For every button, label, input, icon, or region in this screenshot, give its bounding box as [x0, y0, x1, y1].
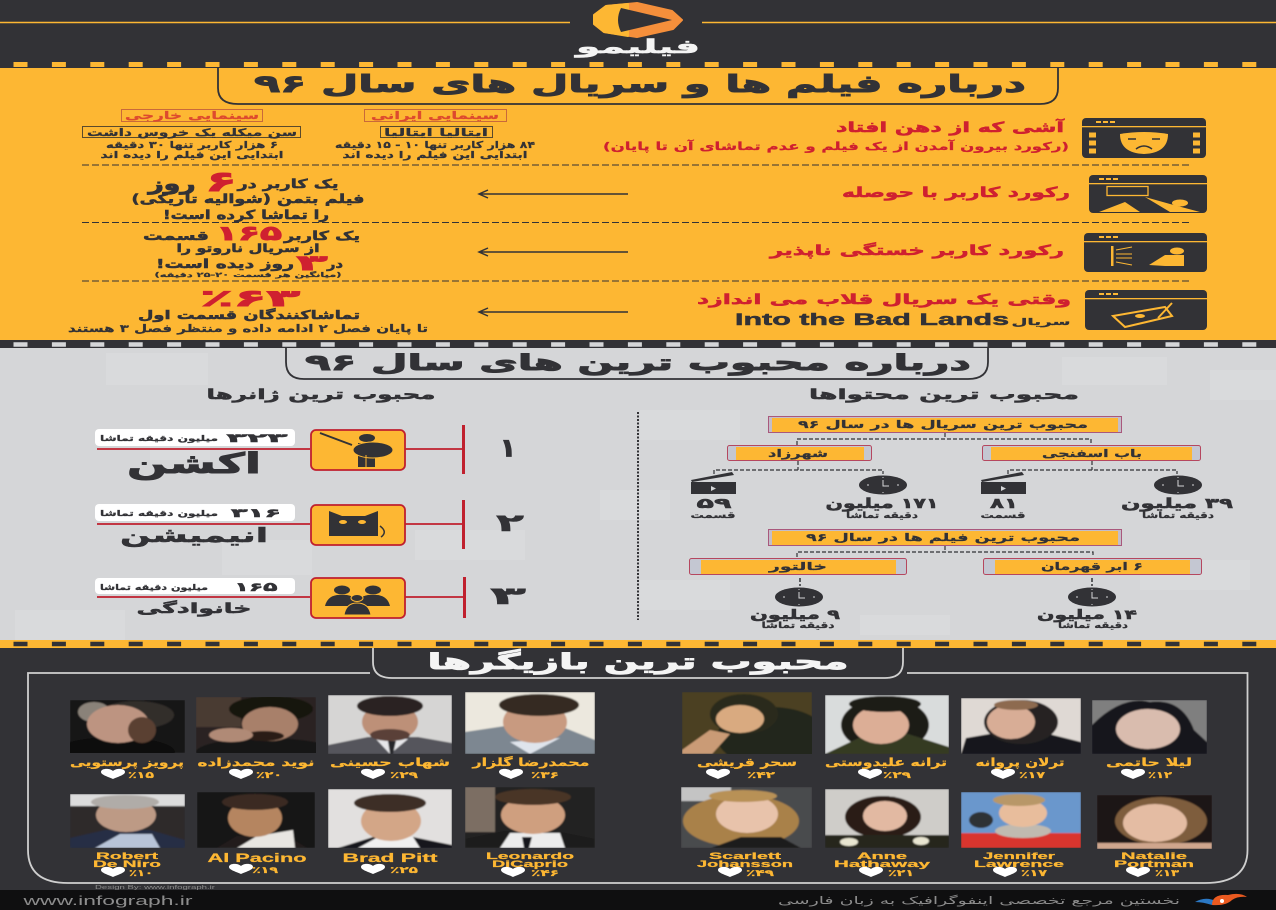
actor: taraneh alidoosti [825, 695, 949, 781]
actor: navid mohammadzadeh [196, 696, 336, 781]
actor: brad pitt: ٪۲۵ [390, 866, 419, 876]
header: popular series: محبوب ترین سریال ها در سال ۹۶ [798, 419, 1088, 431]
actor: shahab hosseini: شهاب حسینی [330, 756, 450, 769]
actor: navid mohammadzadeh: ٪۲۰ [256, 771, 282, 781]
genre 3: family [95, 577, 527, 618]
actor: anne hathaway: Hathaway [834, 859, 932, 870]
row 4: percent text: تماشاکنندگان قسمت اول [138, 308, 360, 323]
panel: favorite actors [0, 640, 1276, 890]
row 3: tireless user text: از سریال ناروتو را [176, 241, 320, 256]
icon: sad theatre mask [1082, 118, 1206, 158]
row 4 heading: وقتی یک سریال قلاب می اندازد [697, 292, 1071, 308]
actor: robert de niro: Robert [96, 851, 160, 862]
actor: anne hathaway [825, 789, 949, 879]
actor: scarlett johansson: ٪۴۹ [746, 869, 775, 879]
actor: sahar ghoreishi: ٪۴۲ [747, 771, 776, 781]
series: spongebob: ۳۹ میلیون [1121, 496, 1234, 512]
row 1: foreign cinema: ۶ هزار کاربر تنها ۳۰ دقیقه [106, 140, 278, 151]
row 2: patient user text: یک کاربر در [236, 176, 338, 191]
row 3: tireless user text: در [326, 257, 343, 271]
arrow 1 [479, 190, 628, 198]
actor: al pacino: Al Pacino [208, 851, 306, 865]
designer credit: Design By: www.infograph.ir [95, 885, 215, 891]
genre 1: action: میلیون دقیقه تماشا [100, 434, 218, 443]
row 1 heading: (رکورد بیرون آمدن از یک فیلم و عدم تماشای آن تا پایان) [603, 139, 1069, 153]
heading tab [373, 648, 903, 678]
actor: robert de niro: ٪۱۰ [129, 869, 153, 879]
actor: sahar ghoreishi: سحر قریشی [697, 756, 797, 769]
genre 2: animation: میلیون دقیقه تماشا [100, 509, 218, 518]
row 1 heading: آشی که از دهن افتاد [836, 118, 1066, 136]
actor: shahab hosseini [328, 695, 452, 781]
panel: most popular of the year [0, 340, 1276, 640]
actor: mohammadreza golzar: ٪۳۶ [531, 771, 559, 781]
header: popular films [768, 530, 1122, 546]
row 1: foreign cinema: سن میکله یک خروس داشت [87, 127, 297, 139]
film: big hero 6 [984, 558, 1202, 631]
row 4 heading: سریال [1012, 317, 1070, 328]
actor: shahab hosseini: ٪۲۹ [390, 771, 419, 781]
row 2: patient user text [132, 165, 364, 222]
series: shahrzad: ۵۹ [696, 496, 732, 512]
genre 3: family: میلیون دقیقه تماشا [100, 583, 208, 592]
actor: sahar ghoreishi [682, 692, 827, 781]
row 4: percent text: تا پایان فصل ۲ ادامه داده و منتظر فصل ۳ هستند [68, 323, 428, 335]
genre 1: action [95, 425, 515, 480]
genre 1: action: ۳۲۳ [226, 431, 289, 445]
heading: genres: محبوب ترین ژانرها [206, 387, 436, 403]
icon: tired user at screen [1084, 233, 1207, 272]
actor: scarlett johansson [681, 787, 812, 879]
actor: taraneh alidoosti: ترانه علیدوستی [825, 756, 947, 769]
actor: taraneh parvaneh: ترلان پروانه [976, 756, 1064, 769]
row 3: tireless user text: ۳ [296, 251, 328, 275]
actors frame [28, 673, 1248, 883]
genre 1: action: ۱ [501, 434, 515, 462]
actor: brad pitt: Brad Pitt [342, 851, 438, 865]
film: khaltoor: دقیقه تماشا [762, 621, 835, 631]
actor: natalie portman: Natalie [1121, 851, 1187, 862]
actor: leonardo dicaprio: ٪۴۶ [531, 869, 559, 879]
actor: parviz parastooi [55, 700, 185, 781]
tree: popular series [690, 416, 1234, 521]
row 2: patient user text: ۶ [205, 165, 237, 198]
icon: watching tv lying down [1089, 175, 1207, 213]
genre 3: family: ۳ [490, 582, 527, 610]
actor: natalie portman: ٪۱۳ [1155, 869, 1180, 879]
row 3: tireless user text: یک کاربر [283, 228, 360, 243]
actor: parviz parastooi: پرویز پرستویی [70, 756, 184, 769]
row 1: foreign cinema: سینمایی خارجی [125, 110, 259, 122]
film: khaltoor: ۹ میلیون [750, 608, 840, 623]
actor: anne hathaway: ٪۲۱ [888, 869, 914, 879]
genre 2: animation: ۲ [496, 509, 525, 537]
series: spongebob: قسمت [980, 511, 1026, 521]
heading: contents: محبوب ترین محتواها [809, 387, 1079, 403]
film: big hero 6: ۱۴ میلیون [1037, 608, 1137, 623]
row 2 heading: رکورد کاربر با حوصله [842, 185, 1070, 201]
actor: al pacino: ٪۱۹ [252, 866, 279, 876]
actor: scarlett johansson: Johansson [697, 859, 793, 870]
row 2: patient user text: روز [147, 174, 196, 195]
header: popular films: محبوب ترین فیلم ها در سال ۹۶ [806, 532, 1080, 544]
dashed separators [82, 165, 1189, 281]
footer bar [0, 890, 1276, 910]
series: shahrzad: دقیقه تماشا [846, 511, 919, 521]
genre 1: action: اکشن [127, 447, 261, 480]
actor: al pacino [197, 792, 315, 876]
series: shahrzad [690, 446, 938, 521]
row 3: tireless user text: روز دیده است! [156, 256, 294, 271]
row 3 heading: رکورد کاربر خستگی ناپذیر [768, 242, 1064, 259]
actor: robert de niro: De Niro [93, 859, 161, 870]
actor: scarlett johansson: Scarlett [709, 851, 783, 862]
row 1: iranian cinema: ۸۴ هزار کاربر تنها ۱۰ - ۱۵ دقیقه [335, 140, 535, 151]
heading tab [218, 68, 1058, 104]
row 4: percent text: ٪۶۳ [200, 286, 300, 312]
logo: filimo [574, 3, 700, 58]
heading tab [286, 348, 988, 379]
heading tab: درباره فیلم ها و سریال های سال ۹۶ [254, 70, 1026, 98]
icon: tablet and hook [1085, 290, 1207, 330]
row 2: patient user text: فیلم بتمن (شوالیه تاریکی) [132, 191, 364, 206]
arrow 3 [479, 308, 628, 316]
genre 2: animation [95, 500, 525, 549]
row 3: tireless user text: ۱۶۵ [216, 221, 282, 245]
actor: leila hatami: ٪۱۲ [1148, 771, 1173, 781]
actor: taraneh alidoosti: ٪۲۹ [883, 771, 912, 781]
row 1: foreign cinema [82, 110, 300, 161]
row 1: iranian cinema: سینمایی ایرانی [371, 110, 499, 122]
actor: mohammadreza golzar [465, 692, 595, 781]
row 1: iranian cinema: ایتالیا ایتالیا [384, 127, 488, 139]
series: shahrzad: ۱۷۱ میلیون [826, 496, 938, 512]
actor: taraneh parvaneh [961, 698, 1081, 781]
actor: taraneh parvaneh: ٪۱۷ [1019, 771, 1046, 781]
actor: natalie portman [1097, 795, 1212, 879]
actor: jennifer lawrence: ٪۱۷ [1021, 869, 1048, 879]
series: spongebob: باب اسفنجی [1042, 448, 1142, 460]
row 1: iranian cinema [335, 110, 535, 161]
genre 2: animation: ۳۱۶ [231, 506, 281, 520]
header band [0, 0, 1276, 68]
actor: leonardo dicaprio: DiCaprio [492, 859, 568, 870]
genre 3: family: ۱۶۵ [234, 580, 278, 594]
row 1: iranian cinema: ابتدایی این فیلم را دیده اند [342, 150, 528, 161]
heading tab: محبوب ترین بازیگرها [428, 648, 848, 675]
actor: anne hathaway: Anne [857, 851, 907, 862]
actor: natalie portman: Portman [1114, 859, 1194, 870]
actor: jennifer lawrence: Lawrence [974, 859, 1064, 870]
actor: leila hatami [1092, 700, 1207, 781]
row 1 heading [603, 118, 1069, 153]
actor: leila hatami: لیلا حاتمی [1106, 756, 1192, 769]
actor: jennifer lawrence [961, 792, 1081, 879]
film: big hero 6: دقیقه تماشا [1058, 621, 1129, 631]
row 4: percent text [68, 286, 428, 335]
row 3: tireless user text: قسمت [143, 228, 209, 243]
strip: section top [0, 640, 1276, 648]
genre 3: family: خانوادگی [136, 600, 252, 617]
arrow 2 [479, 248, 628, 256]
row 2: patient user text: را تماشا کرده است! [163, 207, 329, 222]
actor: brad pitt [328, 789, 452, 876]
actor: parviz parastooi: ٪۱۵ [128, 771, 155, 781]
series: shahrzad: شهرزاد [768, 448, 828, 460]
series: spongebob: ۸۱ [990, 496, 1018, 512]
row 1: foreign cinema: ابتدایی این فیلم را دیده اند [100, 150, 284, 161]
actor: leonardo dicaprio: Leonardo [486, 851, 574, 862]
logo: filimo: فیلیمو [574, 36, 700, 58]
footer logo [1195, 894, 1247, 905]
footer bar: www.infograph.ir [22, 893, 194, 908]
heading tab: درباره محبوب ترین های سال ۹۶ [305, 351, 971, 376]
panel: about films and series [0, 68, 1276, 340]
film: khaltoor [690, 558, 906, 631]
background faint screens [15, 353, 1276, 640]
dotted divider [637, 412, 639, 620]
actor: jennifer lawrence: Jennifer [983, 851, 1056, 862]
tree: popular films [690, 530, 1202, 631]
row 4 heading: Into the Bad Lands [735, 310, 1009, 329]
strip: section top [0, 340, 1276, 348]
actor: leonardo dicaprio [465, 787, 595, 879]
series: spongebob: دقیقه تماشا [1142, 511, 1215, 521]
row 3: tireless user text [143, 221, 360, 279]
film: khaltoor: خالتور [767, 561, 827, 573]
series: spongebob [980, 446, 1234, 521]
actor: mohammadreza golzar: محمدرضا گلزار [471, 756, 590, 769]
genre 2: animation: انیمیشن [120, 523, 268, 547]
row 3: tireless user text: (میانگین هر قسمت ۲۰-۲۵ دقیقه) [154, 271, 342, 279]
actor: robert de niro [70, 794, 185, 879]
header: popular series [768, 416, 1122, 432]
footer bar: نخستین مرجع تخصصی اینفوگرافیک به زبان فارسی [778, 894, 1180, 907]
series: shahrzad: قسمت [690, 511, 736, 521]
actor: navid mohammadzadeh: نوید محمدزاده [198, 756, 314, 769]
film: big hero 6: ۶ ابر قهرمان [1041, 561, 1143, 573]
row 4 heading [697, 292, 1071, 329]
